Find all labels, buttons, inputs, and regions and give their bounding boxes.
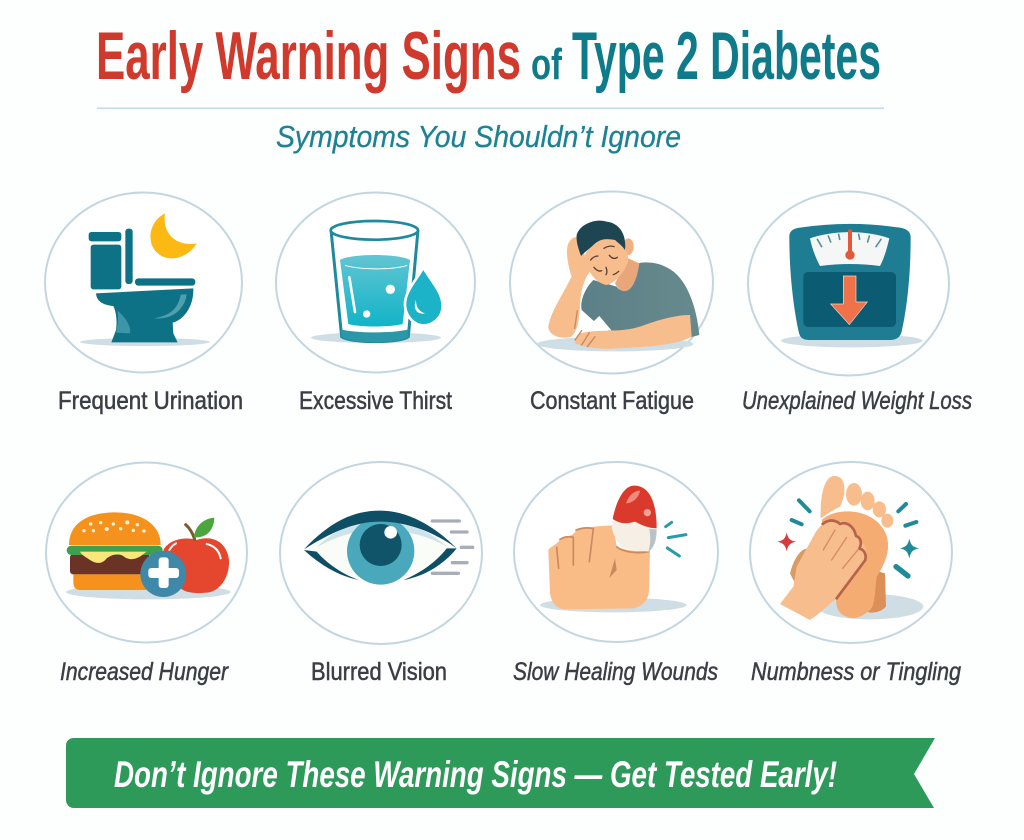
icon: tired man leaning on table	[537, 221, 699, 351]
icon: glass of water with drop	[311, 221, 443, 343]
panel: numbness or tingling	[750, 462, 961, 686]
label: Numbness or Tingling	[751, 658, 961, 686]
label: Slow Healing Wounds	[513, 658, 718, 686]
label: Unexplained Weight Loss	[742, 387, 972, 415]
subtitle: Symptoms You Shouldn’t Ignore	[276, 119, 681, 154]
icon: hand rubbing foot with tingles	[777, 476, 923, 620]
panel: unexplained weight loss	[742, 192, 972, 415]
panel: constant fatigue	[510, 192, 713, 415]
banner	[66, 738, 935, 808]
panel: frequent urination	[45, 192, 243, 415]
icon: toilet and moon	[80, 213, 210, 346]
label: Frequent Urination	[58, 387, 243, 415]
title: of	[531, 40, 562, 89]
label: Constant Fatigue	[530, 387, 694, 415]
label: Increased Hunger	[60, 658, 229, 686]
icon: burger, apple and plus badge	[66, 512, 231, 599]
label: Blurred Vision	[311, 658, 447, 686]
panel: slow healing wounds	[513, 462, 718, 686]
icon: bathroom scale with down arrow	[781, 224, 922, 347]
panel: blurred vision	[280, 462, 482, 686]
panel: excessive thirst	[276, 192, 475, 415]
panel: increased hunger	[46, 462, 247, 686]
title: Early Warning Signs	[96, 18, 521, 94]
icon: eye with blur lines	[304, 511, 473, 585]
label: Excessive Thirst	[299, 387, 452, 415]
icon: bandaged finger with wound	[540, 486, 687, 612]
